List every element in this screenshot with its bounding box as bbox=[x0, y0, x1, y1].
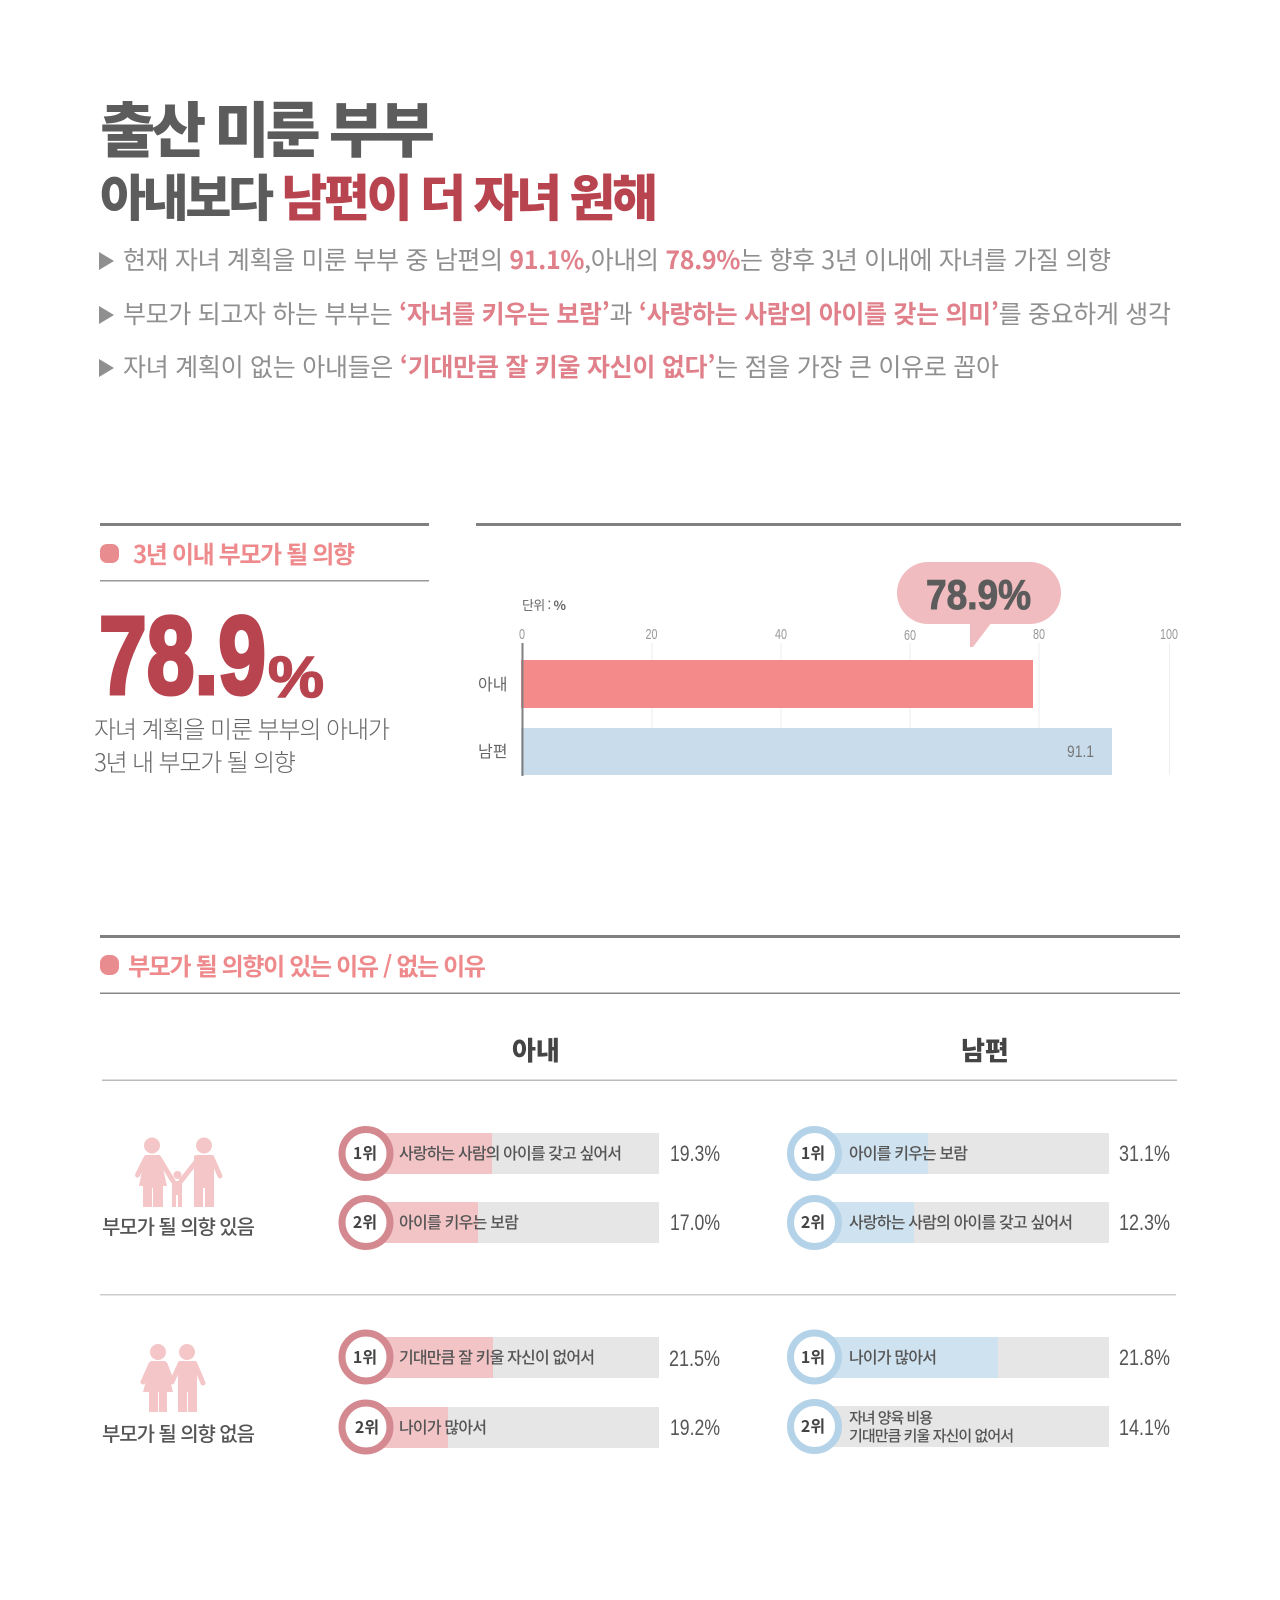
row: wife no intention 1: 1위 bbox=[353, 1344, 377, 1368]
row: wife intends 2 bbox=[342, 1198, 720, 1246]
row: husband intends 2: 사랑하는 사람의 아이를 갖고 싶어서 bbox=[849, 1209, 1073, 1233]
row: husband no intention 1: 21.8% bbox=[1119, 1345, 1170, 1370]
big number: 78.9 bbox=[99, 594, 266, 718]
label: no intention: 부모가 될 의향 없음 bbox=[102, 1418, 255, 1447]
bullet 3: 자녀 계획이 없는 아내들은 ‘기대만큼 잘 키울 자신이 없다’는 점을 가장 큰 이유로 꼽아 bbox=[123, 348, 999, 384]
row: wife no intention 2: 19.2% bbox=[670, 1415, 720, 1440]
row: husband intends 1: 31.1% bbox=[1119, 1141, 1170, 1166]
row: husband no intention 1: 1위 bbox=[801, 1344, 825, 1368]
callout bbox=[897, 562, 1061, 647]
section heading: 3년 이내 부모가 될 의향 bbox=[133, 535, 355, 570]
icon: couple bbox=[143, 1344, 203, 1412]
row: wife intends 1: 사랑하는 사람의 아이를 갖고 싶어서 bbox=[399, 1140, 622, 1164]
big number: % bbox=[268, 645, 324, 710]
row: wife intends 1: 1위 bbox=[353, 1140, 377, 1164]
unit label: 단위 : % bbox=[522, 595, 566, 614]
axis labels bbox=[519, 626, 1178, 644]
axis labels: 100 bbox=[1160, 626, 1178, 643]
title: 출산 미룬 부부 bbox=[100, 83, 435, 170]
row: husband no intention 2: 14.1% bbox=[1119, 1415, 1170, 1440]
bullet 2: 부모가 되고자 하는 부부는 ‘자녀를 키우는 보람’과 ‘사랑하는 사람의 아이를 갖는 의미’를 중요하게 생각 bbox=[123, 295, 1171, 331]
row: wife no intention 1 bbox=[342, 1333, 720, 1381]
row: wife no intention 2: 나이가 많아서 bbox=[399, 1414, 487, 1438]
value: husband: 91.1 bbox=[1067, 742, 1094, 761]
bullet 1: 현재 자녀 계획을 미룬 부부 중 남편의 91.1%,아내의 78.9%는 향후 3년 이내에 자녀를 가질 의향 bbox=[123, 241, 1111, 277]
row: husband no intention 2: 자녀 양육 비용 bbox=[849, 1407, 933, 1428]
row: wife intends 2: 17.0% bbox=[670, 1210, 720, 1235]
icon: section dot bbox=[100, 955, 119, 975]
row: husband intends 1: 아이를 키우는 보람 bbox=[849, 1140, 968, 1164]
row: wife no intention 1: 21.5% bbox=[669, 1346, 720, 1371]
label: intends to be parents: 부모가 될 의향 있음 bbox=[102, 1211, 255, 1240]
description: 자녀 계획을 미룬 부부의 아내가 bbox=[94, 710, 390, 745]
row: wife no intention 2 bbox=[342, 1403, 720, 1451]
title: 아내보다 남편이 더 자녀 원해 bbox=[100, 159, 658, 231]
row: husband intends 1: 1위 bbox=[801, 1140, 825, 1164]
grid lines bbox=[652, 643, 1170, 775]
row: wife intends 2: 2위 bbox=[353, 1209, 377, 1233]
section heading: 부모가 될 의향이 있는 이유 / 없는 이유 bbox=[128, 947, 486, 982]
icon: family with child bbox=[138, 1138, 220, 1207]
row: wife no intention 2: 2위 bbox=[355, 1414, 379, 1438]
axis labels: 20 bbox=[646, 626, 658, 643]
column header: wife: 아내 bbox=[512, 1031, 560, 1068]
bar: wife bbox=[521, 660, 1033, 708]
row: husband intends 1 bbox=[790, 1130, 1170, 1178]
description: 3년 내 부모가 될 의향 bbox=[94, 743, 296, 778]
row: husband no intention 2: 2위 bbox=[801, 1413, 825, 1437]
icon: section dot bbox=[100, 544, 119, 563]
row: husband intends 2: 2위 bbox=[801, 1209, 825, 1233]
row: husband no intention 2 bbox=[790, 1402, 1170, 1450]
category label: wife: 아내 bbox=[478, 671, 507, 695]
row: wife no intention 1: 기대만큼 잘 키울 자신이 없어서 bbox=[399, 1344, 595, 1368]
row: wife intends 2: 아이를 키우는 보람 bbox=[399, 1209, 519, 1233]
column header: husband: 남편 bbox=[961, 1031, 1009, 1068]
title bbox=[100, 83, 658, 231]
row: husband no intention 1: 나이가 많아서 bbox=[849, 1344, 937, 1368]
row: husband intends 2 bbox=[790, 1198, 1170, 1246]
axis labels: 60 bbox=[904, 627, 916, 644]
row: wife intends 1: 19.3% bbox=[670, 1141, 720, 1166]
axis labels: 80 bbox=[1033, 626, 1045, 643]
row: wife intends 1 bbox=[342, 1130, 720, 1178]
panel: bar chart bbox=[476, 523, 1181, 776]
row: husband intends 2: 12.3% bbox=[1119, 1210, 1170, 1235]
description bbox=[94, 710, 390, 778]
panel: intent within 3 years headline bbox=[94, 523, 429, 778]
axis line bbox=[522, 643, 524, 776]
summary bullets bbox=[99, 241, 1171, 384]
bar: husband bbox=[521, 728, 1112, 775]
category label: husband: 남편 bbox=[478, 738, 507, 762]
callout: 78.9% bbox=[926, 571, 1031, 618]
panel: reasons bbox=[100, 935, 1180, 1451]
axis labels: 0 bbox=[519, 626, 525, 643]
row: husband no intention 2: 기대만큼 키울 자신이 없어서 bbox=[849, 1425, 1014, 1446]
row: husband no intention 1 bbox=[790, 1333, 1170, 1381]
axis labels: 40 bbox=[775, 626, 787, 643]
